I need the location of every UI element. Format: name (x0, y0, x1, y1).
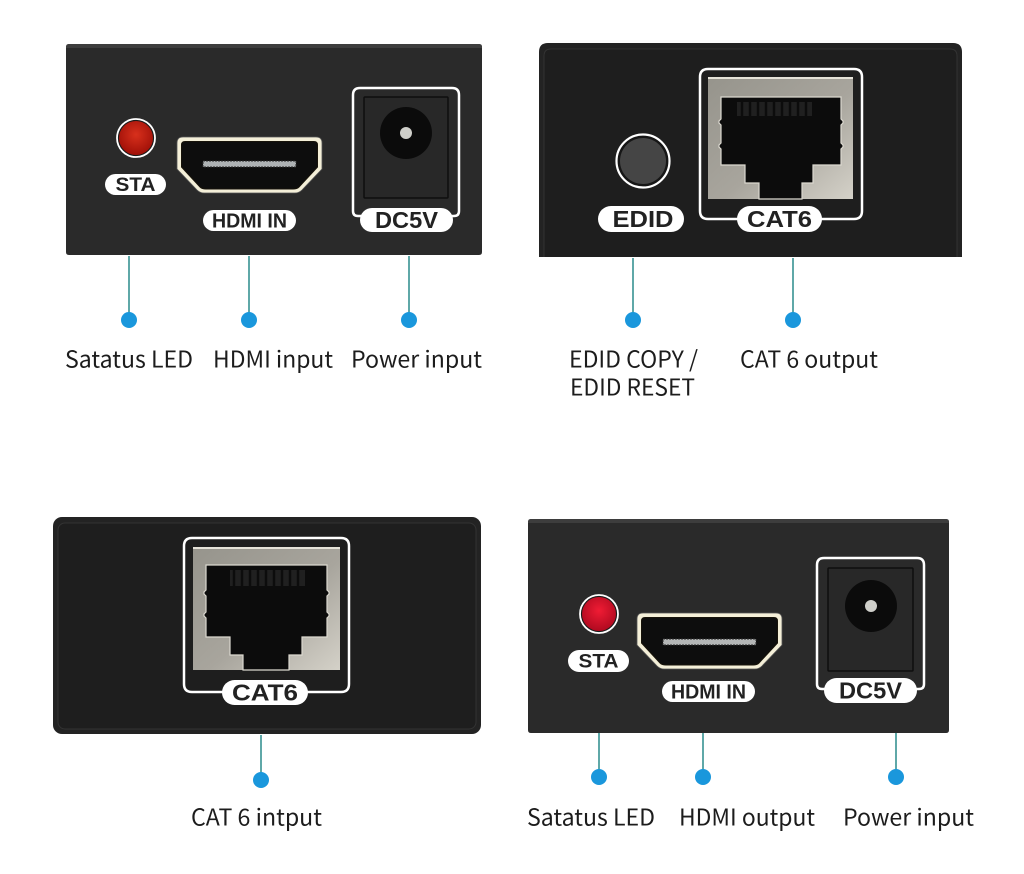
callout: Satatus LED: Satatus LED (65, 340, 193, 374)
callout: Power input: Power input (843, 798, 974, 832)
HDMI IN badge: HDMI IN (212, 210, 287, 232)
HDMI IN badge: HDMI IN (671, 680, 746, 704)
STA badge: STA (116, 174, 156, 196)
STA badge (568, 650, 629, 672)
panel: CAT6 output transmitter rear (539, 43, 962, 257)
STA badge (105, 174, 166, 196)
CAT6 frame and badge (700, 69, 862, 232)
callout: HDMI input (213, 256, 333, 374)
STA badge: STA (578, 650, 618, 672)
DC5V frame and badge: DC5V (839, 678, 903, 704)
callout: CAT 6 output (740, 258, 878, 374)
panel: CAT6 input receiver rear (53, 517, 481, 734)
icon: status LED (117, 119, 155, 157)
icon: RJ45 port (708, 77, 853, 199)
DC5V frame and badge (353, 88, 459, 233)
EDID badge: EDID (612, 206, 674, 232)
callout: HDMI output (679, 733, 815, 832)
panel: HDMI output receiver front (528, 519, 949, 733)
callout: Satatus LED (527, 733, 655, 832)
icon: HDMI port (637, 613, 782, 669)
EDID badge (598, 206, 684, 232)
callout: Power input (843, 733, 974, 832)
panel: HDMI input transmitter front (66, 44, 482, 255)
CAT6 frame and badge (184, 538, 349, 706)
callout: Power input: Power input (351, 340, 482, 374)
callout: Satatus LED: Satatus LED (527, 798, 655, 832)
callout: Satatus LED (65, 256, 193, 374)
icon: RJ45 port (193, 547, 340, 670)
icon: HDMI port (177, 137, 322, 193)
callout: EDID COPY / EDID RESET: EDID COPY / (569, 340, 698, 374)
icon: DC power jack (364, 97, 448, 198)
icon: EDID button (616, 134, 670, 188)
callout: EDID COPY / EDID RESET: EDID RESET (570, 368, 695, 402)
callout: CAT 6 intput: CAT 6 intput (191, 798, 322, 832)
callout: EDID COPY / EDID RESET (569, 258, 698, 402)
CAT6 frame and badge: CAT6 (747, 206, 812, 232)
CAT6 frame and badge: CAT6 (232, 680, 298, 706)
callout: HDMI input: HDMI input (213, 340, 333, 374)
callout: CAT 6 intput (191, 735, 322, 832)
callout: HDMI output: HDMI output (679, 798, 815, 832)
icon: DC power jack (828, 568, 913, 671)
callout: Power input (351, 256, 482, 374)
DC5V frame and badge (817, 558, 924, 704)
callout: CAT 6 output: CAT 6 output (740, 340, 878, 374)
DC5V frame and badge: DC5V (375, 207, 439, 233)
icon: status LED (580, 595, 618, 633)
